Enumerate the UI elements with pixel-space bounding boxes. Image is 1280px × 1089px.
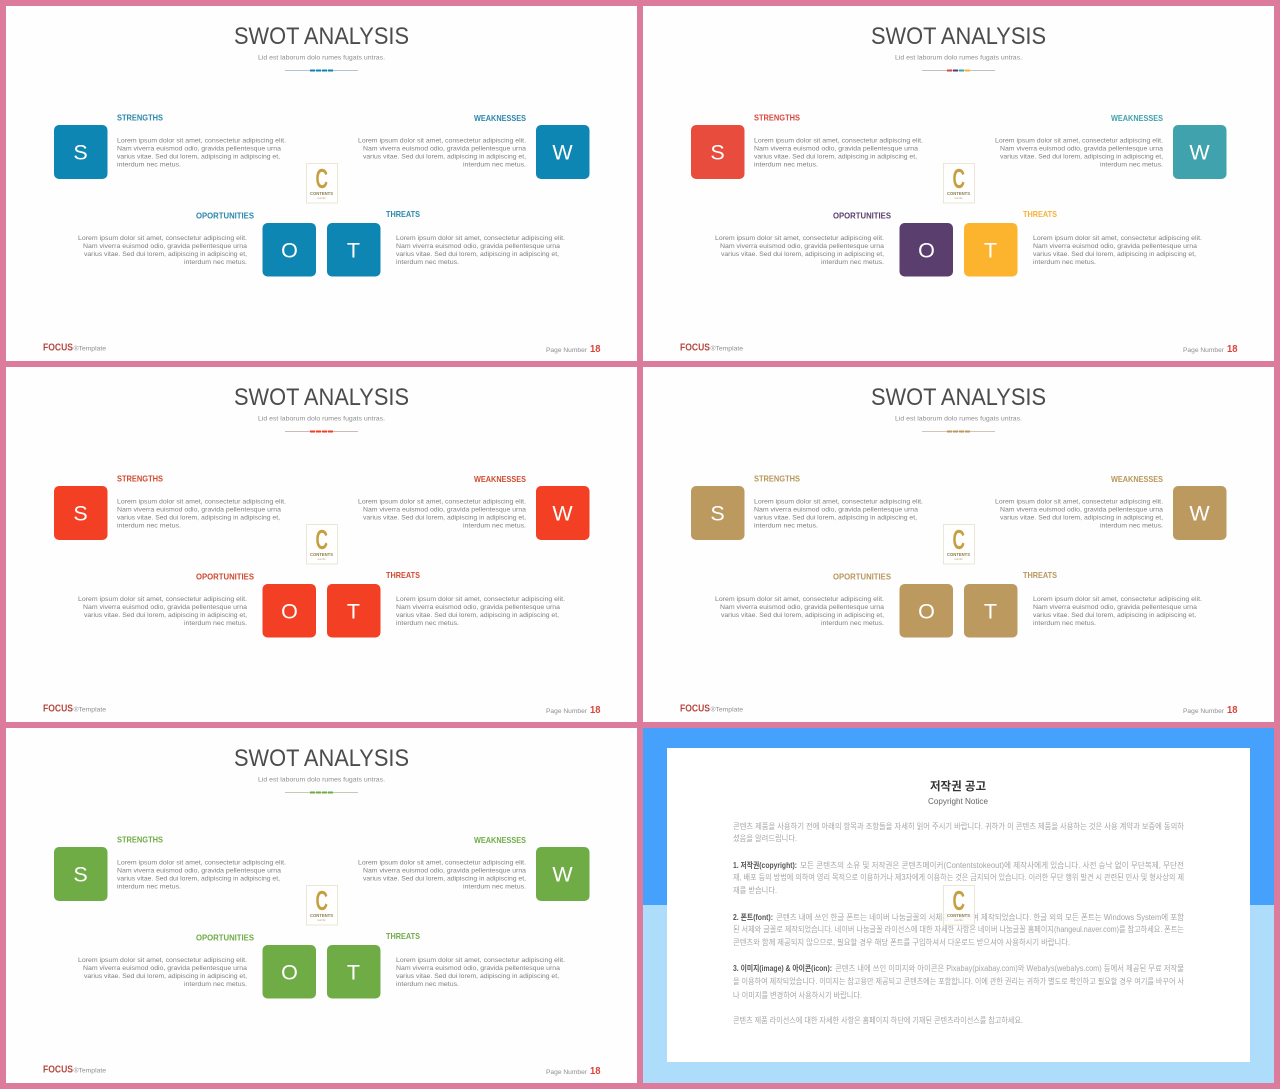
text: intro paragraph xyxy=(733,821,1184,843)
text: threats: interdum nec metus. xyxy=(1033,620,1096,627)
page number: 18 xyxy=(590,1066,601,1077)
text: strengths: Nam viverra euismod odio, gravida pellentesque urna xyxy=(754,145,918,152)
text: font section xyxy=(733,912,1184,947)
title: SWOT ANALYSIS xyxy=(234,384,409,411)
page number xyxy=(546,344,601,355)
text: threats: interdum nec metus. xyxy=(1033,259,1096,266)
logo: real life xyxy=(954,196,963,200)
text: threats: Lorem ipsum dolor sit amet, consectetur adipiscing elit. xyxy=(396,235,565,242)
box: S xyxy=(691,486,744,540)
text: font section: 2. 폰트(font): xyxy=(733,913,773,922)
page number: 18 xyxy=(1227,344,1238,355)
footer brand: FOCUS xyxy=(680,704,710,715)
logo: C xyxy=(952,163,965,194)
text: threats: Lorem ipsum dolor sit amet, consectetur adipiscing elit. xyxy=(396,957,565,964)
page number xyxy=(546,1066,601,1077)
footer brand: ®Template xyxy=(710,706,743,714)
text: strengths: Nam viverra euismod odio, gravida pellentesque urna xyxy=(117,145,281,152)
text: opportunities: Lorem ipsum dolor sit amet, consectetur adipiscing elit. xyxy=(78,235,247,242)
text: strengths: Nam viverra euismod odio, gravida pellentesque urna xyxy=(117,867,281,874)
text: weaknesses xyxy=(358,498,526,529)
text: weaknesses: Nam viverra euismod odio, gravida pellentesque urna xyxy=(363,145,526,152)
text: opportunities xyxy=(715,596,884,627)
box: W xyxy=(536,847,590,901)
text: strengths xyxy=(117,859,286,890)
heading: strengths: STRENGTHS xyxy=(117,834,163,844)
text: copyright section: 모든 콘텐츠의 소유 및 저작권은 콘텐츠메이커(Contentstokeout)에 제작사에게 있습니다. 사전 승낙 없이 무단복제, 무단전 xyxy=(800,860,1184,870)
box: T xyxy=(327,945,380,998)
text: image and icon section: 을 이용하여 제작되었습니다. 이미지는 참고용만 제공되고 콘텐츠에는 포함합니다. 이에 관한 권리는 귀하가 별도로 확인하고 필요할 경우 여기를 바꾸어 사 xyxy=(733,976,1184,986)
heading: weaknesses: WEAKNESSES xyxy=(474,474,526,484)
logo: real life xyxy=(317,196,326,200)
footer brand xyxy=(680,343,743,354)
text: threats xyxy=(1033,235,1202,266)
subtitle: Lid est laborum dolo rumes fugats untras. xyxy=(258,54,385,61)
logo: real life xyxy=(954,557,963,561)
page number: 18 xyxy=(590,705,601,716)
footer brand: FOCUS xyxy=(43,704,73,715)
divider xyxy=(922,430,995,432)
box: O xyxy=(262,584,316,638)
text: weaknesses: Lorem ipsum dolor sit amet, consectetur adipiscing elit. xyxy=(358,137,526,144)
text: threats: varius vitae. Sed dui lorem, adipiscing in adipiscing et, xyxy=(396,612,559,619)
heading: opportunities: OPORTUNITIES xyxy=(196,572,254,582)
box: W xyxy=(1173,486,1226,540)
text: opportunities: varius vitae. Sed dui lorem, adipiscing in adipiscing et, xyxy=(84,973,247,980)
text: strengths: Lorem ipsum dolor sit amet, consectetur adipiscing elit. xyxy=(117,859,286,866)
text: copyright section xyxy=(733,860,1184,895)
text: opportunities: varius vitae. Sed dui lorem, adipiscing in adipiscing et, xyxy=(84,612,247,619)
footer brand xyxy=(43,1065,106,1076)
text: threats: Nam viverra euismod odio, gravida pellentesque urna xyxy=(396,604,560,611)
text: threats: Nam viverra euismod odio, gravida pellentesque urna xyxy=(1033,243,1197,250)
divider xyxy=(285,70,358,72)
box: S: S xyxy=(710,140,725,164)
text: opportunities: Lorem ipsum dolor sit amet, consectetur adipiscing elit. xyxy=(78,596,247,603)
footer brand: ®Template xyxy=(74,706,106,714)
text: weaknesses: interdum nec metus. xyxy=(463,161,526,168)
heading: opportunities: OPORTUNITIES xyxy=(196,210,254,220)
box: T: T xyxy=(984,600,997,624)
text: threats xyxy=(1033,596,1202,627)
text: weaknesses: Lorem ipsum dolor sit amet, consectetur adipiscing elit. xyxy=(358,859,526,866)
text: opportunities: Lorem ipsum dolor sit amet, consectetur adipiscing elit. xyxy=(78,957,247,964)
text: opportunities: interdum nec metus. xyxy=(821,259,884,266)
text: weaknesses: Nam viverra euismod odio, gravida pellentesque urna xyxy=(363,867,526,874)
text: weaknesses: varius vitae. Sed dui lorem, adipiscing in adipiscing et, xyxy=(363,514,526,521)
text: opportunities: Nam viverra euismod odio, gravida pellentesque urna xyxy=(720,604,884,611)
subtitle: Lid est laborum dolo rumes fugats untras. xyxy=(895,415,1022,422)
text: threats: Nam viverra euismod odio, gravida pellentesque urna xyxy=(396,965,560,972)
text: threats xyxy=(396,596,565,627)
page number: 18 xyxy=(1227,705,1238,716)
page number xyxy=(1183,344,1238,355)
box: S: S xyxy=(73,862,88,886)
box: T xyxy=(327,223,380,276)
text: threats: Nam viverra euismod odio, gravida pellentesque urna xyxy=(396,243,560,250)
text: opportunities: interdum nec metus. xyxy=(821,620,884,627)
text: strengths: Nam viverra euismod odio, gravida pellentesque urna xyxy=(754,506,918,513)
text: strengths: varius vitae. Sed dui lorem, adipiscing in adipiscing et, xyxy=(754,514,917,521)
text: weaknesses: Nam viverra euismod odio, gravida pellentesque urna xyxy=(1000,506,1163,513)
panel: green SWOT slide xyxy=(6,728,637,1083)
text: threats: interdum nec metus. xyxy=(396,620,459,627)
box: O xyxy=(262,223,316,276)
divider xyxy=(285,430,358,432)
box: O xyxy=(900,223,953,276)
box: T xyxy=(964,584,1018,638)
text: opportunities: interdum nec metus. xyxy=(184,981,247,988)
text: copyright section: 1. 저작권(copyright): xyxy=(733,860,797,870)
footer brand xyxy=(43,704,106,715)
box: S xyxy=(691,125,744,179)
text: strengths: varius vitae. Sed dui lorem, adipiscing in adipiscing et, xyxy=(754,153,917,160)
footer brand: FOCUS xyxy=(680,343,710,354)
title: SWOT ANALYSIS xyxy=(871,23,1046,50)
box: S: S xyxy=(73,140,88,164)
box: O: O xyxy=(918,600,935,624)
logo xyxy=(944,885,974,925)
text: intro paragraph: 셨음을 알려드립니다. xyxy=(733,833,797,843)
box: W xyxy=(536,486,590,540)
footer brand: ®Template xyxy=(74,345,106,353)
text: copyright section: 재를 받습니다. xyxy=(733,885,777,895)
text: license note: 콘텐츠 제품 라이선스에 대한 자세한 사항은 홈페이지 하단에 기재된 콘텐츠라이선스를 참고하세요. xyxy=(733,1015,1023,1025)
footer brand: FOCUS xyxy=(43,1065,73,1076)
heading: opportunities: OPORTUNITIES xyxy=(833,210,891,220)
heading: threats: THREATS xyxy=(386,931,420,941)
text: weaknesses: Lorem ipsum dolor sit amet, consectetur adipiscing elit. xyxy=(995,498,1163,505)
logo: real life xyxy=(317,557,326,561)
heading: weaknesses: WEAKNESSES xyxy=(1111,474,1163,484)
text: threats: interdum nec metus. xyxy=(396,259,459,266)
logo: CONTENTS xyxy=(310,552,333,557)
text: weaknesses xyxy=(358,859,526,890)
text: weaknesses: varius vitae. Sed dui lorem, adipiscing in adipiscing et, xyxy=(363,875,526,882)
text: strengths: interdum nec metus. xyxy=(117,522,181,529)
logo: real life xyxy=(954,918,963,922)
logo xyxy=(306,524,338,564)
text: weaknesses: varius vitae. Sed dui lorem, adipiscing in adipiscing et, xyxy=(1000,153,1163,160)
box: W xyxy=(1173,125,1226,179)
box: O xyxy=(900,584,953,638)
text: weaknesses: Lorem ipsum dolor sit amet, consectetur adipiscing elit. xyxy=(358,498,526,505)
text: font section: 콘텐츠와 함께 제공되지 않으므로, 필요할 경우 해당 폰트를 구입하셔서 다운로드 받으셔야 사용하시기 바랍니다. xyxy=(733,937,1070,947)
text: opportunities: Nam viverra euismod odio, gravida pellentesque urna xyxy=(83,965,247,972)
footer brand: FOCUS xyxy=(43,343,73,354)
box: W: W xyxy=(552,862,573,886)
text: weaknesses: interdum nec metus. xyxy=(1100,522,1163,529)
text: strengths: interdum nec metus. xyxy=(754,522,818,529)
text: strengths: varius vitae. Sed dui lorem, adipiscing in adipiscing et, xyxy=(117,514,280,521)
heading: opportunities: OPORTUNITIES xyxy=(196,932,254,942)
logo xyxy=(944,163,974,203)
box: S: S xyxy=(73,502,88,526)
heading: strengths: STRENGTHS xyxy=(117,474,163,484)
heading: threats: THREATS xyxy=(1023,209,1057,219)
box: T: T xyxy=(984,238,997,262)
text: opportunities: interdum nec metus. xyxy=(184,259,247,266)
panel: red SWOT slide xyxy=(6,367,637,722)
heading: copyright notice Korean: 저작권 공고 xyxy=(930,779,986,793)
text: opportunities: Nam viverra euismod odio, gravida pellentesque urna xyxy=(720,243,884,250)
box: W xyxy=(536,125,590,179)
logo: CONTENTS xyxy=(947,552,970,557)
text: threats: interdum nec metus. xyxy=(396,981,459,988)
text: strengths xyxy=(117,498,286,529)
page number: Page Number xyxy=(1183,347,1225,354)
text: strengths: Lorem ipsum dolor sit amet, consectetur adipiscing elit. xyxy=(754,137,923,144)
text: weaknesses: interdum nec metus. xyxy=(463,883,526,890)
heading: weaknesses: WEAKNESSES xyxy=(474,835,526,845)
box: O xyxy=(262,945,316,998)
heading: strengths: STRENGTHS xyxy=(117,112,163,122)
logo: C xyxy=(952,524,965,555)
subtitle: Lid est laborum dolo rumes fugats untras. xyxy=(258,776,385,783)
text: strengths xyxy=(117,137,286,168)
logo: C xyxy=(952,885,965,916)
logo: C xyxy=(316,885,328,916)
text: threats: Lorem ipsum dolor sit amet, consectetur adipiscing elit. xyxy=(1033,235,1202,242)
title: SWOT ANALYSIS xyxy=(871,384,1046,411)
text: strengths: varius vitae. Sed dui lorem, adipiscing in adipiscing et, xyxy=(117,875,280,882)
heading: copyright notice English: Copyright Notice xyxy=(928,797,989,806)
logo: CONTENTS xyxy=(947,913,970,918)
text: opportunities: interdum nec metus. xyxy=(184,620,247,627)
logo xyxy=(306,885,338,925)
text: opportunities xyxy=(78,235,247,266)
box: O: O xyxy=(281,960,298,984)
page number: Page Number xyxy=(546,708,588,715)
text: strengths: interdum nec metus. xyxy=(117,883,181,890)
text: strengths: Lorem ipsum dolor sit amet, consectetur adipiscing elit. xyxy=(117,137,286,144)
text: image and icon section: 3. 이미지(image) & 아이콘(icon): xyxy=(733,963,832,973)
panel: blue SWOT slide xyxy=(6,6,637,361)
text: weaknesses: Nam viverra euismod odio, gravida pellentesque urna xyxy=(1000,145,1163,152)
text: weaknesses: interdum nec metus. xyxy=(463,522,526,529)
text: threats xyxy=(396,957,565,988)
footer brand xyxy=(680,704,743,715)
heading: strengths: STRENGTHS xyxy=(754,474,800,484)
box: W: W xyxy=(1189,502,1210,526)
box: O: O xyxy=(281,600,298,624)
box: W: W xyxy=(552,140,573,164)
divider xyxy=(922,70,995,72)
text: strengths xyxy=(754,498,923,529)
box: T xyxy=(327,584,380,638)
text: threats: varius vitae. Sed dui lorem, adipiscing in adipiscing et, xyxy=(1033,251,1196,258)
box: O: O xyxy=(281,238,298,262)
page number: Page Number xyxy=(546,1069,588,1076)
box: T: T xyxy=(347,960,360,984)
heading: opportunities: OPORTUNITIES xyxy=(833,572,891,582)
text: opportunities: varius vitae. Sed dui lorem, adipiscing in adipiscing et, xyxy=(721,251,884,258)
text: strengths: interdum nec metus. xyxy=(117,161,181,168)
logo: CONTENTS xyxy=(310,913,333,918)
box: T xyxy=(964,223,1018,276)
text: image and icon section: 나 이미지를 변경하여 사용하시기 바랍니다. xyxy=(733,990,862,1000)
text: image and icon section: 콘텐츠 내에 쓰인 이미지와 아이콘은 Pixabay(pixabay.com)와 Webalys(webalys.com) 등에서 제공된 무료 저작물 xyxy=(835,963,1184,973)
text: threats xyxy=(396,235,565,266)
logo: C xyxy=(316,163,328,194)
page number xyxy=(1183,705,1238,716)
footer brand: ®Template xyxy=(74,1067,106,1075)
heading: threats: THREATS xyxy=(1023,570,1057,580)
box: W: W xyxy=(552,502,573,526)
text: opportunities: Lorem ipsum dolor sit amet, consectetur adipiscing elit. xyxy=(715,235,884,242)
footer brand xyxy=(43,343,106,354)
text: weaknesses xyxy=(995,137,1163,168)
text: opportunities xyxy=(78,596,247,627)
text: strengths: varius vitae. Sed dui lorem, adipiscing in adipiscing et, xyxy=(117,153,280,160)
text: opportunities: Nam viverra euismod odio, gravida pellentesque urna xyxy=(83,604,247,611)
text: image and icon section xyxy=(733,963,1184,1000)
text: weaknesses: Lorem ipsum dolor sit amet, consectetur adipiscing elit. xyxy=(995,137,1163,144)
text: font section: 된 서체와 글꼴로 제작되었습니다. 네이버 나눔글꼴 라이선스에 대한 자세한 사항은 네이버 나눔글꼴 홈페이지(hangeul.naver.com)를 참고하세요. 폰트는 xyxy=(733,924,1184,934)
box: S xyxy=(54,847,108,901)
subtitle: Lid est laborum dolo rumes fugats untras. xyxy=(895,54,1022,61)
text: threats: Lorem ipsum dolor sit amet, consectetur adipiscing elit. xyxy=(396,596,565,603)
text: weaknesses: interdum nec metus. xyxy=(1100,161,1163,168)
box: S: S xyxy=(710,502,725,526)
text: threats: Nam viverra euismod odio, gravida pellentesque urna xyxy=(1033,604,1197,611)
box: S xyxy=(54,125,108,179)
logo xyxy=(944,524,974,564)
text: intro paragraph: 콘텐츠 제품을 사용하기 전에 아래의 항목과 조항들을 자세히 읽어 주시기 바랍니다. 귀하가 이 콘텐츠 제품을 사용하는 것은 사용 계약과 보증에 동의하 xyxy=(733,821,1184,831)
heading: threats: THREATS xyxy=(386,209,420,219)
logo: C xyxy=(316,524,328,555)
text: copyright section: 재, 배포 등의 방법에 의하여 영리 목적으로 이용하거나 제3자에게 이용하는 것은 금지되어 있습니다. 이러한 무단 행위 발견 시 관련된 민사 및 형사상의 제 xyxy=(733,872,1184,882)
box: S xyxy=(54,486,108,540)
title: SWOT ANALYSIS xyxy=(234,745,409,772)
text: weaknesses: Nam viverra euismod odio, gravida pellentesque urna xyxy=(363,506,526,513)
text: opportunities: Lorem ipsum dolor sit amet, consectetur adipiscing elit. xyxy=(715,596,884,603)
box: T: T xyxy=(347,238,360,262)
page number: 18 xyxy=(590,344,601,355)
text: weaknesses: varius vitae. Sed dui lorem, adipiscing in adipiscing et, xyxy=(1000,514,1163,521)
page number: Page Number xyxy=(1183,708,1225,715)
text: weaknesses xyxy=(995,498,1163,529)
page number: Page Number xyxy=(546,347,588,354)
text: strengths: Nam viverra euismod odio, gravida pellentesque urna xyxy=(117,506,281,513)
logo xyxy=(306,163,338,203)
text: weaknesses: varius vitae. Sed dui lorem, adipiscing in adipiscing et, xyxy=(363,153,526,160)
heading: weaknesses: WEAKNESSES xyxy=(474,113,526,123)
heading: strengths: STRENGTHS xyxy=(754,112,800,122)
text: threats: Lorem ipsum dolor sit amet, consectetur adipiscing elit. xyxy=(1033,596,1202,603)
text: weaknesses xyxy=(358,137,526,168)
text: strengths: Lorem ipsum dolor sit amet, consectetur adipiscing elit. xyxy=(754,498,923,505)
text: threats: varius vitae. Sed dui lorem, adipiscing in adipiscing et, xyxy=(396,973,559,980)
text: threats: varius vitae. Sed dui lorem, adipiscing in adipiscing et, xyxy=(1033,612,1196,619)
divider xyxy=(285,792,358,794)
subtitle: Lid est laborum dolo rumes fugats untras. xyxy=(258,415,385,422)
text: strengths: Lorem ipsum dolor sit amet, consectetur adipiscing elit. xyxy=(117,498,286,505)
panel: copyright notice xyxy=(643,728,1274,1083)
title: SWOT ANALYSIS xyxy=(234,23,409,50)
text: opportunities xyxy=(78,957,247,988)
logo: real life xyxy=(317,918,326,922)
logo: CONTENTS xyxy=(947,191,970,196)
heading: threats: THREATS xyxy=(386,570,420,580)
text: threats: varius vitae. Sed dui lorem, adipiscing in adipiscing et, xyxy=(396,251,559,258)
logo: CONTENTS xyxy=(310,191,333,196)
page number xyxy=(546,705,601,716)
box: O: O xyxy=(918,238,935,262)
text: font section: 콘텐츠 내에 쓰인 한글 폰트는 네이버 나눔글꼴의 서체를 사용하여 제작되었습니다. 한글 외의 모든 폰트는 Windows System에 포함 xyxy=(776,912,1184,922)
heading: weaknesses: WEAKNESSES xyxy=(1111,113,1163,123)
text: opportunities: Nam viverra euismod odio, gravida pellentesque urna xyxy=(83,243,247,250)
text: opportunities: varius vitae. Sed dui lorem, adipiscing in adipiscing et, xyxy=(721,612,884,619)
text: strengths xyxy=(754,137,923,168)
box: T: T xyxy=(347,600,360,624)
text: opportunities: varius vitae. Sed dui lorem, adipiscing in adipiscing et, xyxy=(84,251,247,258)
text: opportunities xyxy=(715,235,884,266)
panel: tan SWOT slide xyxy=(643,367,1274,722)
text: strengths: interdum nec metus. xyxy=(754,161,818,168)
footer brand: ®Template xyxy=(710,345,743,353)
panel: multicolour SWOT slide xyxy=(643,6,1274,361)
box: W: W xyxy=(1189,140,1210,164)
